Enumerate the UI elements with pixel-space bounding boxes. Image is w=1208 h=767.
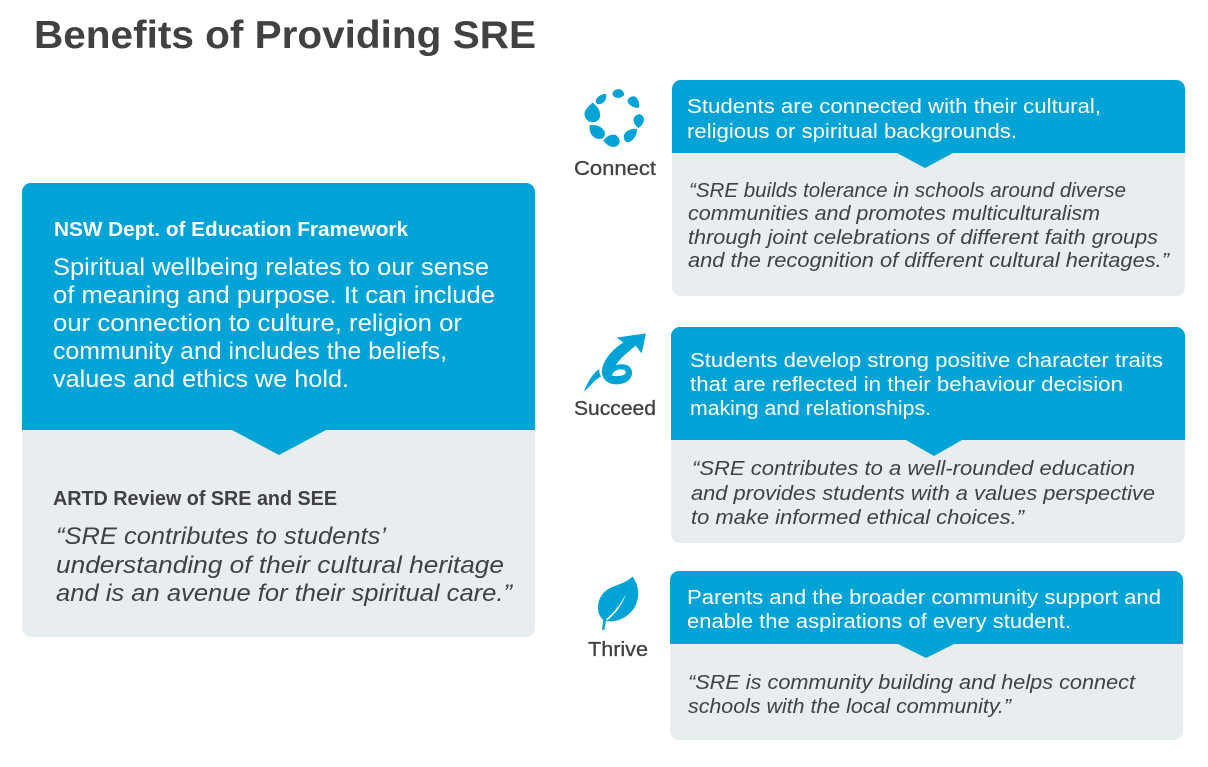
quote: connect (688, 180, 1170, 272)
text block: spiritual wellbeing: of meaning and purpose. It can include (53, 282, 495, 309)
text block: succeed statement: Students develop strong positive character traits (690, 350, 1163, 372)
text block: spiritual wellbeing: community and includes the beliefs, (53, 338, 447, 365)
text block: spiritual wellbeing: values and ethics we hold. (53, 366, 349, 393)
quote: connect: “SRE builds tolerance in schools around diverse (689, 180, 1126, 202)
text block: connect statement: religious or spiritual backgrounds. (687, 121, 1017, 143)
heading: ARTD review: ARTD Review of SRE and SEE (53, 488, 337, 510)
quote: succeed (691, 458, 1155, 529)
quote: ARTD review: “SRE contributes to students’ (56, 523, 387, 550)
panel: thrive (670, 571, 1183, 740)
text block: thrive statement (687, 587, 1161, 633)
icon: thrive leaf (598, 577, 638, 630)
quote: thrive: schools with the local community.” (688, 696, 1012, 718)
panel: succeed (671, 327, 1185, 543)
text block: connect statement (687, 96, 1101, 143)
icon: succeed curling arrow (584, 333, 646, 392)
text block: spiritual wellbeing (53, 254, 495, 393)
text block: spiritual wellbeing: Spiritual wellbeing relates to our sense (53, 254, 489, 281)
quote: ARTD review (56, 523, 513, 607)
label: connect: Connect (574, 158, 656, 180)
text block: succeed statement: making and relationships. (690, 398, 931, 420)
quote: ARTD review: and is an avenue for their spiritual care.” (56, 580, 513, 607)
label: thrive: Thrive (588, 639, 648, 661)
text block: connect statement: Students are connected with their cultural, (687, 96, 1101, 118)
quote: connect: through joint celebrations of different faith groups (688, 227, 1158, 249)
text block: thrive statement: enable the aspirations of every student. (687, 611, 1071, 633)
quote: succeed: to make informed ethical choices.” (691, 507, 1025, 529)
quote: succeed: “SRE contributes to a well-rounded education (692, 458, 1135, 480)
quote: succeed: and provides students with a values perspective (691, 483, 1155, 505)
quote: connect: and the recognition of different cultural heritages.” (688, 250, 1170, 272)
text block: spiritual wellbeing: our connection to culture, religion or (53, 310, 462, 337)
label: succeed: Succeed (574, 398, 656, 420)
text block: succeed statement: that are reflected in their behaviour decision (690, 374, 1123, 396)
quote: ARTD review: understanding of their cultural heritage (56, 552, 504, 579)
quote: thrive: “SRE is community building and helps connect (688, 672, 1137, 694)
text block: thrive statement: Parents and the broader community support and (687, 587, 1161, 609)
panel: connect (672, 80, 1185, 296)
title: Benefits of Providing SRE (34, 14, 536, 57)
quote: thrive (688, 672, 1137, 718)
quote: connect: communities and promotes multiculturalism (688, 203, 1100, 225)
icon: connect circle of droplets (585, 90, 643, 146)
heading: NSW framework: NSW Dept. of Education Framework (54, 219, 409, 241)
text block: succeed statement (690, 350, 1163, 420)
panel: framework and review (22, 183, 535, 637)
